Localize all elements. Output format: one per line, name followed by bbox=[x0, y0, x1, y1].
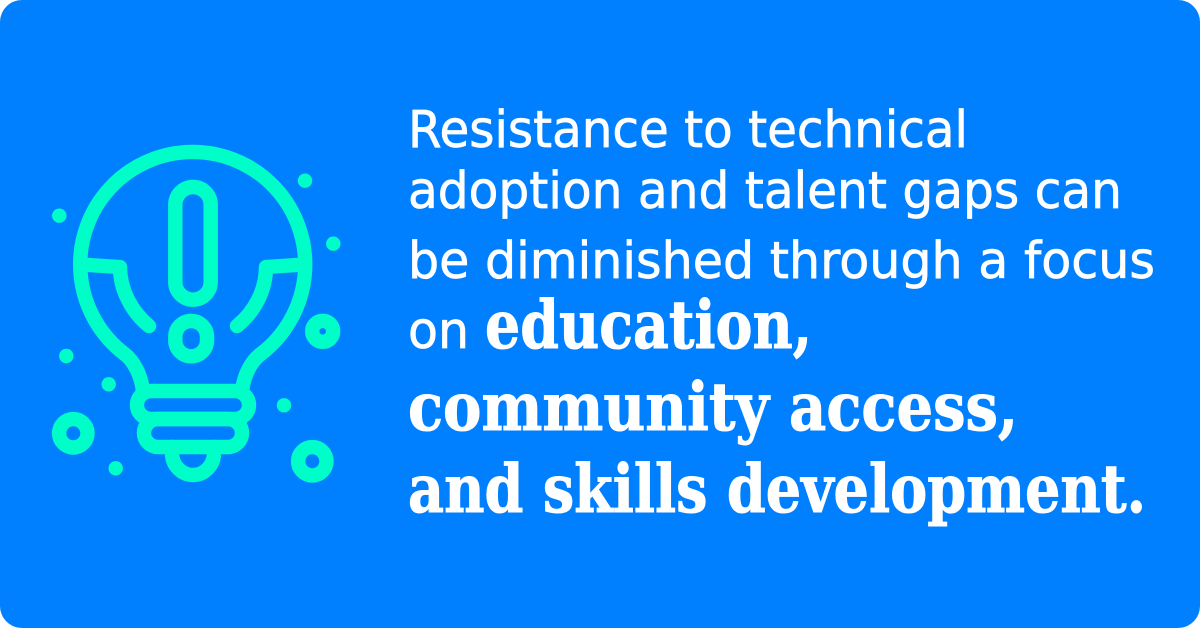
line 4 regular: on bbox=[408, 301, 469, 360]
icon: light bulb with exclamation mark bbox=[59, 152, 333, 475]
line 4 bold: education, bbox=[485, 286, 812, 364]
ring: right bbox=[312, 321, 333, 342]
exclamation dot bbox=[175, 321, 207, 356]
bulb base lower bbox=[144, 419, 242, 447]
exclamation bar bbox=[175, 187, 211, 300]
ring: bottom left bbox=[59, 419, 88, 447]
right filament bbox=[237, 265, 297, 326]
line 1: Resistance to technical bbox=[408, 100, 968, 159]
bulb outline bbox=[80, 152, 305, 391]
left filament bbox=[88, 265, 149, 326]
text block: message bbox=[408, 100, 1155, 528]
decorative sparkle dots bbox=[52, 174, 340, 475]
line 2: adoption and talent gaps can bbox=[408, 161, 1122, 220]
bulb tip bbox=[172, 447, 214, 475]
bulb base upper bbox=[137, 391, 249, 419]
ring: bottom right bbox=[298, 447, 326, 475]
line 3: be diminished through a focus bbox=[408, 231, 1155, 290]
line 5 bold: community access, bbox=[408, 368, 1018, 446]
